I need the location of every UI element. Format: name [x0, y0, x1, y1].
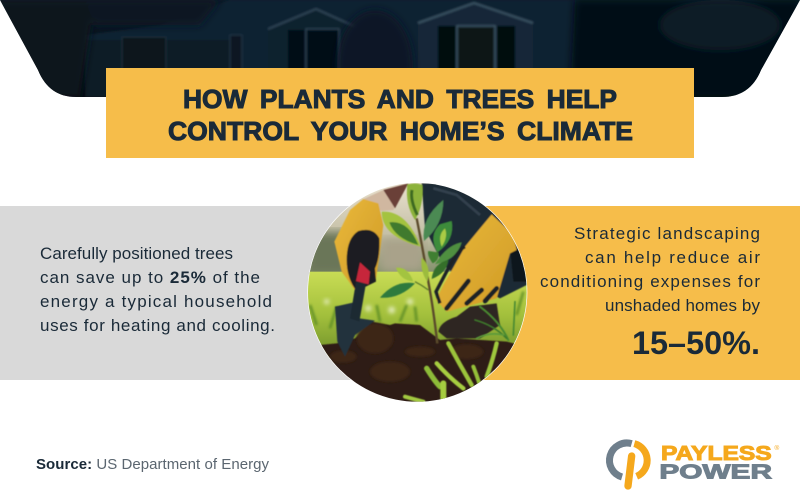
right statistic text: 15–50%.: [632, 325, 760, 361]
left statistic text: can save up to 25% of the: [40, 268, 260, 287]
title banner: [106, 68, 694, 158]
blurred background: [308, 183, 527, 358]
right statistic text: conditioning expenses for: [540, 272, 760, 291]
logo icon: [609, 443, 647, 486]
panel: right yellow band: [420, 206, 800, 380]
left glove: [334, 199, 383, 291]
logo: Payless Power: [609, 442, 779, 486]
right glove: [436, 214, 517, 312]
title text: CONTROL YOUR HOME’S CLIMATE: [168, 116, 633, 146]
right statistic text: can help reduce air: [585, 248, 760, 267]
trowel: [335, 262, 375, 357]
tree masses: [0, 0, 800, 97]
left statistic text: uses for heating and cooling.: [40, 316, 275, 335]
logo wordmark: ®: [774, 444, 779, 452]
source line: Source: US Department of Energy: [36, 456, 270, 473]
title text: [168, 84, 633, 146]
house silhouette: [85, 0, 575, 98]
right statistic text: Strategic landscaping: [574, 224, 760, 243]
sapling: [380, 183, 462, 343]
jacket and sleeve: [362, 183, 530, 298]
left statistic text: Carefully positioned trees: [40, 244, 233, 263]
title text: HOW PLANTS AND TREES HELP: [183, 84, 617, 114]
header house photo band: [0, 0, 800, 97]
soil: [321, 321, 514, 402]
logo wordmark: [659, 442, 779, 484]
boot: [438, 303, 500, 338]
right statistic text: unshaded homes by: [605, 296, 760, 315]
logo wordmark: POWER: [659, 461, 772, 484]
logo wordmark: PAYLESS: [661, 442, 772, 465]
left statistic text: [40, 244, 275, 335]
right statistic text: [540, 224, 760, 361]
left statistic text: energy a typical household: [40, 292, 272, 311]
foreground grass blades: [405, 302, 515, 402]
photo: planting a sapling: [307, 183, 528, 402]
panel: left grey band: [0, 206, 420, 380]
